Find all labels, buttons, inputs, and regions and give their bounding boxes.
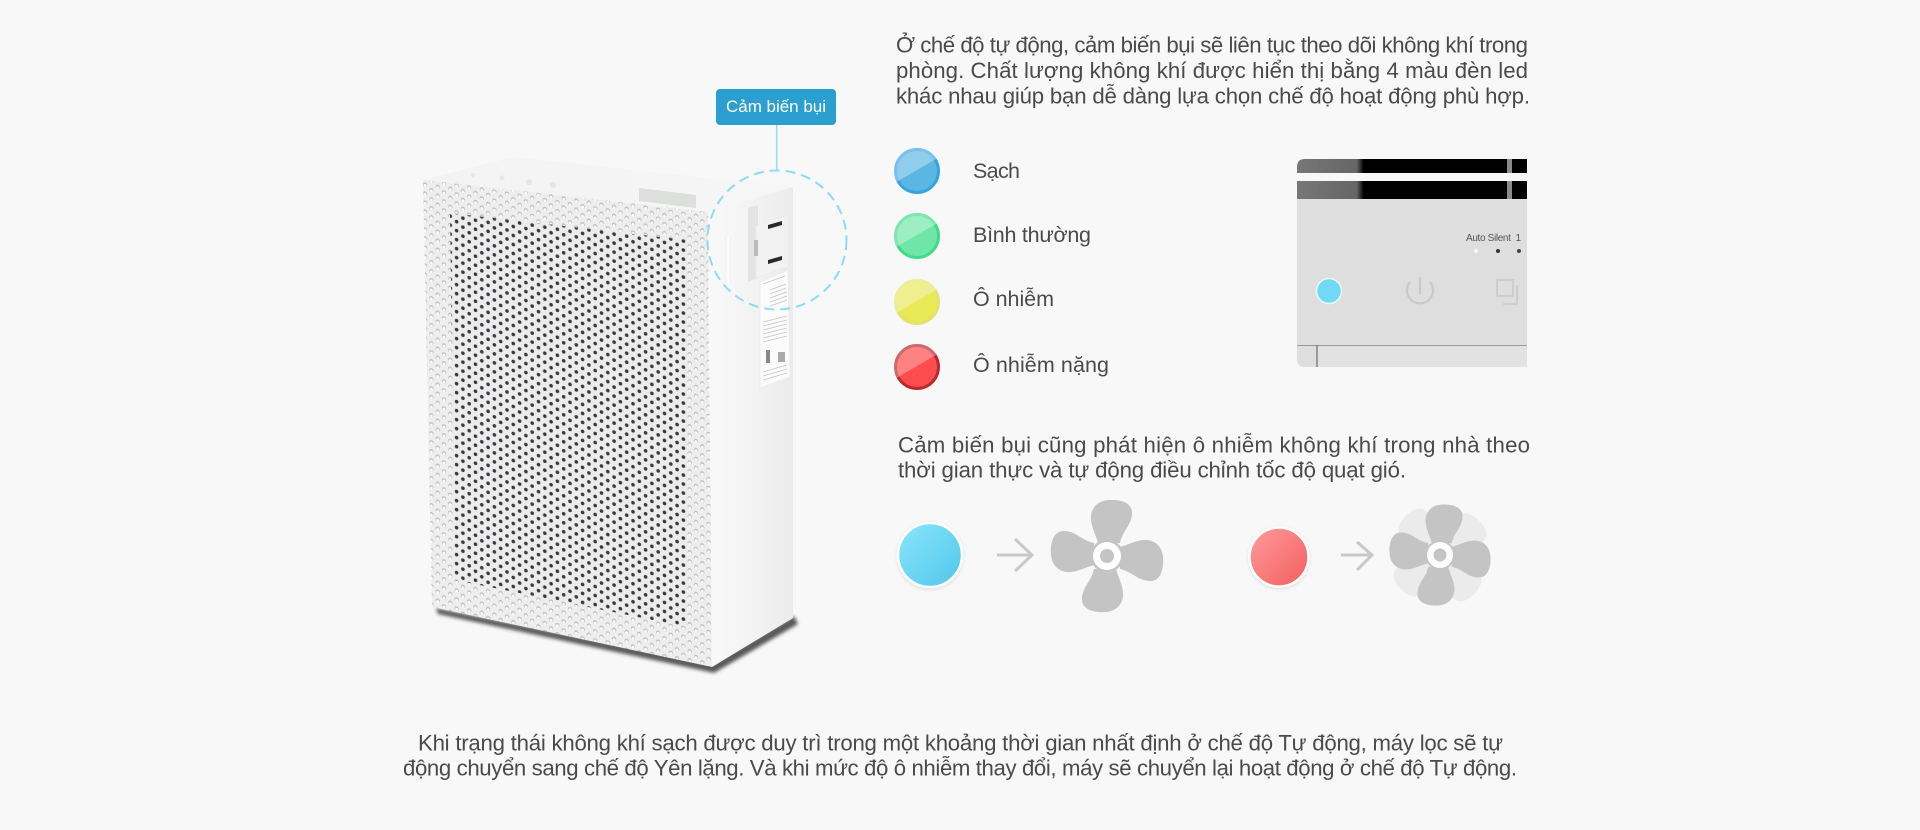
control panel photo	[1297, 159, 1527, 367]
legend item: polluted	[894, 279, 940, 325]
low pollution flow	[898, 500, 1163, 612]
mode labels: Auto Silent 1	[1466, 233, 1521, 244]
footer paragraph	[403, 730, 1517, 780]
callout badge	[716, 89, 836, 125]
air purifier device	[423, 157, 798, 673]
arrow	[1341, 542, 1372, 570]
legend item: clean	[894, 148, 940, 194]
device top controls	[471, 173, 696, 208]
device front dark mesh	[450, 213, 687, 627]
device floor shadow	[436, 608, 798, 673]
intro paragraph: Ở chế độ tự động, cảm biến bụi sẽ liên tục theo dõi không khí trong	[896, 32, 1528, 58]
dust sensor panel	[748, 205, 788, 282]
footer paragraph: động chuyển sang chế độ Yên lặng. Và khi mức độ ô nhiễm thay đổi, máy sẽ chuyển lại hoạt động ở chế độ Tự động.	[403, 756, 1517, 780]
intro paragraph: khác nhau giúp bạn dễ dàng lựa chọn chế độ hoạt động phù hợp.	[896, 84, 1530, 108]
panel lower seam	[1297, 345, 1527, 367]
footer paragraph: Khi trạng thái không khí sạch được duy trì trong một khoảng thời gian nhất định ở chế độ Tự động, máy lọc sẽ tự	[418, 730, 1503, 756]
power icon	[1407, 277, 1433, 303]
sensor callout	[708, 89, 846, 310]
legend label: clean: Sạch	[973, 159, 1020, 183]
device top face	[423, 157, 793, 212]
legend item: normal	[894, 213, 940, 259]
legend label: polluted: Ô nhiễm	[973, 286, 1054, 311]
mode indicator dots	[1474, 249, 1521, 253]
blue indicator circle	[898, 523, 962, 587]
vent band lower	[1297, 181, 1527, 199]
red indicator circle	[1250, 528, 1308, 586]
legend label: normal: Bình thường	[973, 223, 1091, 247]
vent vertical strip	[1507, 159, 1512, 199]
fan icon: fast	[1367, 482, 1513, 628]
arrow	[997, 539, 1032, 571]
fan icon: slow	[1051, 500, 1163, 612]
legend item: heavily polluted	[894, 344, 940, 390]
panel body	[1297, 195, 1527, 367]
device front perforated panel	[423, 180, 712, 667]
instruction sticker	[760, 270, 790, 388]
callout line	[776, 125, 778, 171]
high pollution flow	[1250, 482, 1513, 628]
side handle slit	[726, 236, 730, 284]
sensor paragraph	[898, 432, 1530, 482]
dashed highlight circle	[708, 170, 846, 310]
lower cover	[1318, 346, 1527, 367]
blue status led	[1316, 278, 1342, 304]
callout label: Cảm biến bụi	[726, 97, 826, 116]
sensor paragraph: Cảm biến bụi cũng phát hiện ô nhiễm không khí trong nhà theo	[898, 432, 1530, 458]
intro paragraph: phòng. Chất lượng không khí được hiển thị bằng 4 màu đèn led	[896, 58, 1528, 83]
square button icon	[1497, 280, 1517, 304]
device side face	[708, 187, 793, 667]
vent band upper	[1297, 159, 1527, 173]
air quality legend	[893, 141, 1109, 388]
intro paragraph	[896, 32, 1530, 108]
sensor paragraph: thời gian thực và tự động điều chỉnh tốc độ quạt gió.	[898, 458, 1406, 482]
legend label: heavily polluted: Ô nhiễm nặng	[973, 352, 1109, 377]
